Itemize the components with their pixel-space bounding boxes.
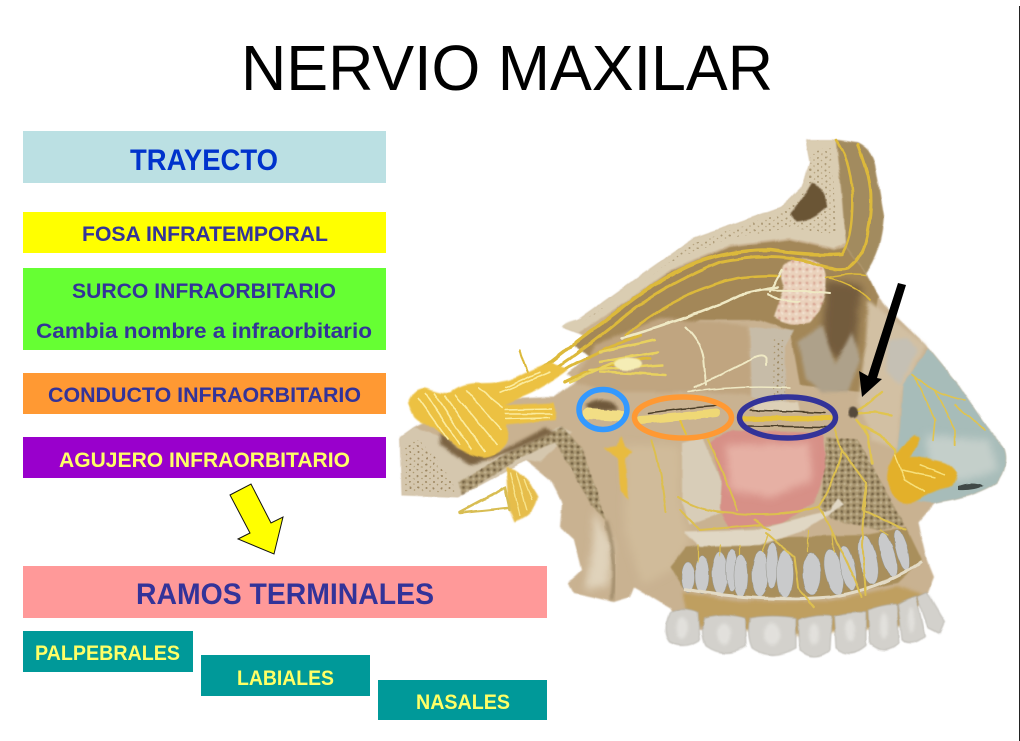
tooth crown highlights (676, 607, 914, 645)
title: NERVIO MAXILAR (241, 32, 773, 104)
sinus surrounding bone (682, 437, 722, 525)
frontal bone (562, 140, 846, 333)
panel: trayecto heading: TRAYECTO (130, 144, 278, 177)
nasal bone grey band (886, 338, 918, 385)
panel: agujero infraorbitario (23, 437, 386, 478)
panel: trayecto heading (23, 131, 386, 183)
panel: ramos terminales heading (23, 566, 547, 618)
panel: ramos terminales heading: RAMOS TERMINALES (136, 578, 434, 611)
panel: labiales (201, 655, 370, 696)
ganglion glow (614, 358, 642, 370)
otic ganglion (604, 437, 633, 500)
dental and alveolar nerves (652, 427, 906, 607)
light bone over the canal (750, 401, 800, 413)
arrow: yellow down to ramos terminales (230, 484, 283, 554)
panel: conducto infraorbitario: CONDUCTO INFRAORBITARIO (48, 383, 361, 407)
eye socket grey wall (798, 325, 860, 392)
light rim under the roots (684, 562, 922, 599)
panel: fosa infratemporal (23, 212, 386, 253)
palatal floor light strip (684, 498, 844, 547)
pterygopalatine ganglion (570, 340, 665, 382)
mandibular fibres (510, 472, 532, 516)
sphenoid speckled band (459, 427, 606, 520)
infraorbital foramen (848, 406, 858, 418)
panel: surco infraorbitario (23, 268, 386, 350)
infraorbital foramen terminal branches (850, 374, 985, 497)
nose alar highlight (925, 435, 998, 482)
marker: blue ring, conducto entry (579, 390, 627, 430)
nasal gland (887, 435, 957, 503)
panel: nasales (378, 680, 547, 720)
sinus highlight (725, 443, 812, 498)
infraorbital nerve trunk (588, 406, 832, 434)
squamous bone left speckle (404, 440, 458, 492)
panel: fosa infratemporal: FOSA INFRATEMPORAL (82, 222, 328, 246)
alveolar cavity (670, 527, 922, 597)
panel: surco infraorbitario: SURCO INFRAORBITARIO (72, 279, 336, 303)
panel: agujero infraorbitario: AGUJERO INFRAORBITARIO (59, 448, 350, 472)
panel: labiales: LABIALES (237, 666, 334, 690)
trigeminal ganglion (408, 362, 568, 458)
nasal cartilage (897, 348, 1005, 503)
panel: palpebrales: PALPEBRALES (35, 641, 180, 665)
panel: surco infraorbitario: Cambia nombre a infraorbitario (36, 319, 372, 343)
marker: navy ring, agujero (740, 397, 836, 438)
skull silhouette (400, 140, 1005, 630)
lacrimal gland (774, 259, 826, 325)
panel: conducto infraorbitario (23, 373, 386, 414)
orbit roof brown band (574, 240, 878, 392)
forehead soft wall (836, 140, 884, 273)
mandibular branches (460, 488, 510, 513)
speckled maxilla right (820, 437, 905, 530)
maxillary sinus pink (710, 430, 826, 530)
panel: palpebrales (23, 631, 193, 672)
alveolar ridge (682, 586, 925, 635)
shadow beneath ganglion (440, 428, 556, 465)
frontal sinus (790, 182, 827, 222)
nasal gland spots and branches (895, 455, 945, 492)
marker: orange ring, conducto (634, 397, 732, 438)
sphenoid bone (400, 427, 572, 497)
ganglion fibre highlights (418, 372, 552, 452)
frontal and supraorbital nerves (520, 140, 871, 382)
maxilla body lighter (625, 445, 690, 585)
ramus rear shading line (606, 520, 614, 600)
page edge line (1019, 6, 1020, 741)
upper tooth roots (682, 528, 913, 598)
nasal bone highlight (858, 300, 926, 450)
frontal bone speckle (585, 148, 836, 320)
ramus highlight (585, 510, 612, 590)
eye socket shadows (822, 280, 862, 362)
nostril (958, 484, 984, 490)
middle fossa lighter wall (574, 318, 752, 395)
panel: nasales: NASALES (416, 690, 510, 714)
upper teeth crowns (666, 592, 945, 657)
illustration: skull section with maxillary nerve (400, 140, 1005, 657)
lacrimal and pterygopalatine white nerves (622, 270, 830, 392)
shadow above infraorbital nerve (586, 400, 618, 410)
column speckle (772, 338, 786, 405)
arrow: black pointer to infraorbital foramen (859, 283, 906, 397)
orbital bone column (750, 327, 794, 407)
mandibular nerve (506, 467, 538, 522)
